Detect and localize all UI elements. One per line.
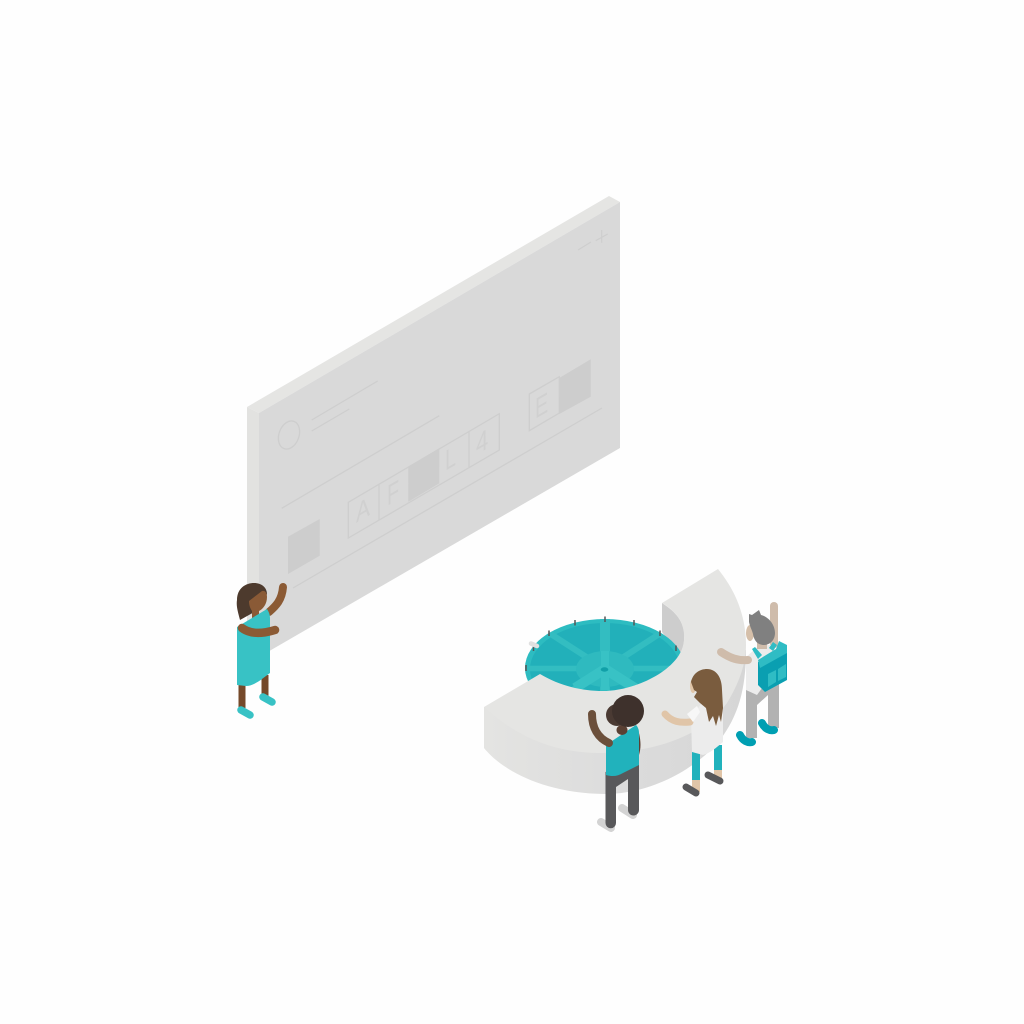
- front arm: [242, 628, 275, 633]
- disc hub: [576, 651, 634, 687]
- grey square tile: [288, 519, 320, 574]
- raised arm: [592, 714, 609, 743]
- legs: [696, 745, 718, 781]
- icon: profile circle: [275, 418, 303, 452]
- header text lines: [282, 381, 439, 508]
- wall board: [247, 196, 620, 657]
- board front face: [259, 202, 620, 657]
- head hair: [612, 695, 644, 727]
- teal turntable disc: [525, 616, 680, 691]
- baseline rule: [293, 408, 602, 588]
- letter L: L: [445, 440, 456, 478]
- person: backpack wearer: [721, 606, 787, 742]
- rim pegs: [526, 616, 676, 671]
- neck: [757, 642, 767, 649]
- dress: [237, 609, 270, 686]
- letter F: F: [387, 475, 399, 513]
- neck: [616, 725, 628, 735]
- legs: [242, 675, 265, 708]
- face: [249, 591, 267, 618]
- grey tile beside E: [559, 359, 591, 414]
- curved wall inner face: [662, 603, 684, 655]
- E tile outline: [529, 377, 559, 431]
- board top face: [247, 196, 620, 413]
- letter E: E: [535, 387, 548, 426]
- ankles: [696, 770, 718, 792]
- grey blank tile: [408, 448, 439, 502]
- sleeve: [687, 706, 700, 722]
- number 4: 4: [476, 423, 488, 461]
- icon: zoom controls: [578, 230, 608, 250]
- shoes: [740, 723, 774, 742]
- white shirt: [691, 703, 723, 755]
- shoes: [686, 775, 720, 793]
- person: woman in teal dress: [237, 583, 283, 715]
- hair: [237, 583, 267, 620]
- person: long-haired woman: [665, 669, 723, 793]
- legs: [746, 668, 779, 738]
- pockets: [768, 670, 776, 687]
- trousers: [606, 755, 639, 828]
- shoes: [601, 808, 633, 828]
- face: [690, 679, 696, 693]
- feet: [241, 697, 272, 715]
- word tiles outline: [348, 414, 499, 538]
- bun hair: [606, 704, 628, 726]
- arc top face: [484, 569, 746, 753]
- shirt: [606, 725, 639, 776]
- long hair: [691, 669, 723, 726]
- board side face: [247, 407, 259, 657]
- turntable assembly: [484, 569, 746, 794]
- far arm sliver: [639, 733, 640, 755]
- face: [746, 625, 754, 641]
- shirt: [746, 645, 775, 695]
- arc side face: [484, 650, 746, 794]
- person: teal shirt dark hair: [592, 695, 644, 828]
- grey hair: [749, 610, 775, 645]
- backpack: [752, 641, 787, 692]
- letter A: A: [356, 491, 371, 529]
- raised arm: [770, 606, 778, 644]
- raised arm: [269, 587, 283, 612]
- arm: [665, 714, 690, 722]
- pointer knob: [531, 644, 537, 646]
- arm reaching: [721, 652, 748, 660]
